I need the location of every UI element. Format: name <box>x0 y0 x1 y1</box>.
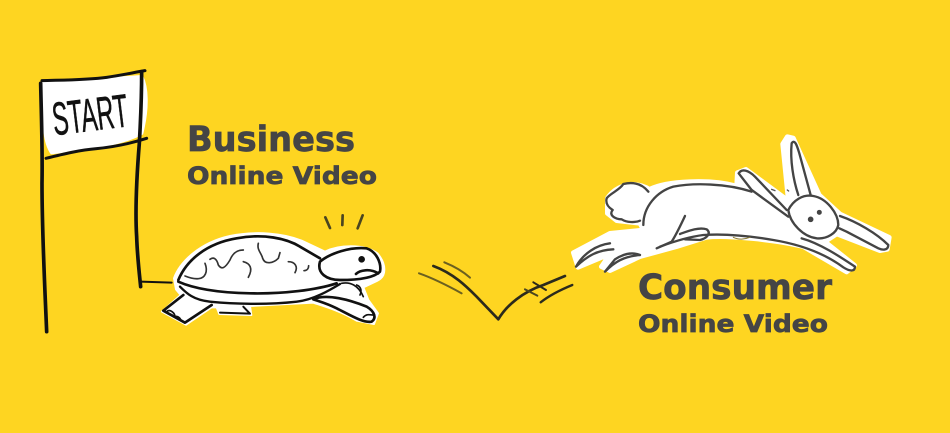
heading: Business Online Video: Business <box>187 120 355 160</box>
heading: Business Online Video: Online Video <box>187 162 377 190</box>
heading: Consumer Online Video <box>638 268 833 338</box>
start flag <box>41 71 172 332</box>
icon: turtle <box>162 215 384 325</box>
surprise marks <box>325 215 363 228</box>
icon: rabbit <box>573 137 889 272</box>
heading: Consumer Online Video: Consumer <box>638 268 833 308</box>
heading: Consumer Online Video: Online Video <box>638 310 828 338</box>
flag label: START: START <box>49 84 131 145</box>
icon: hop trail <box>419 262 572 319</box>
heading: Business Online Video <box>187 120 377 190</box>
